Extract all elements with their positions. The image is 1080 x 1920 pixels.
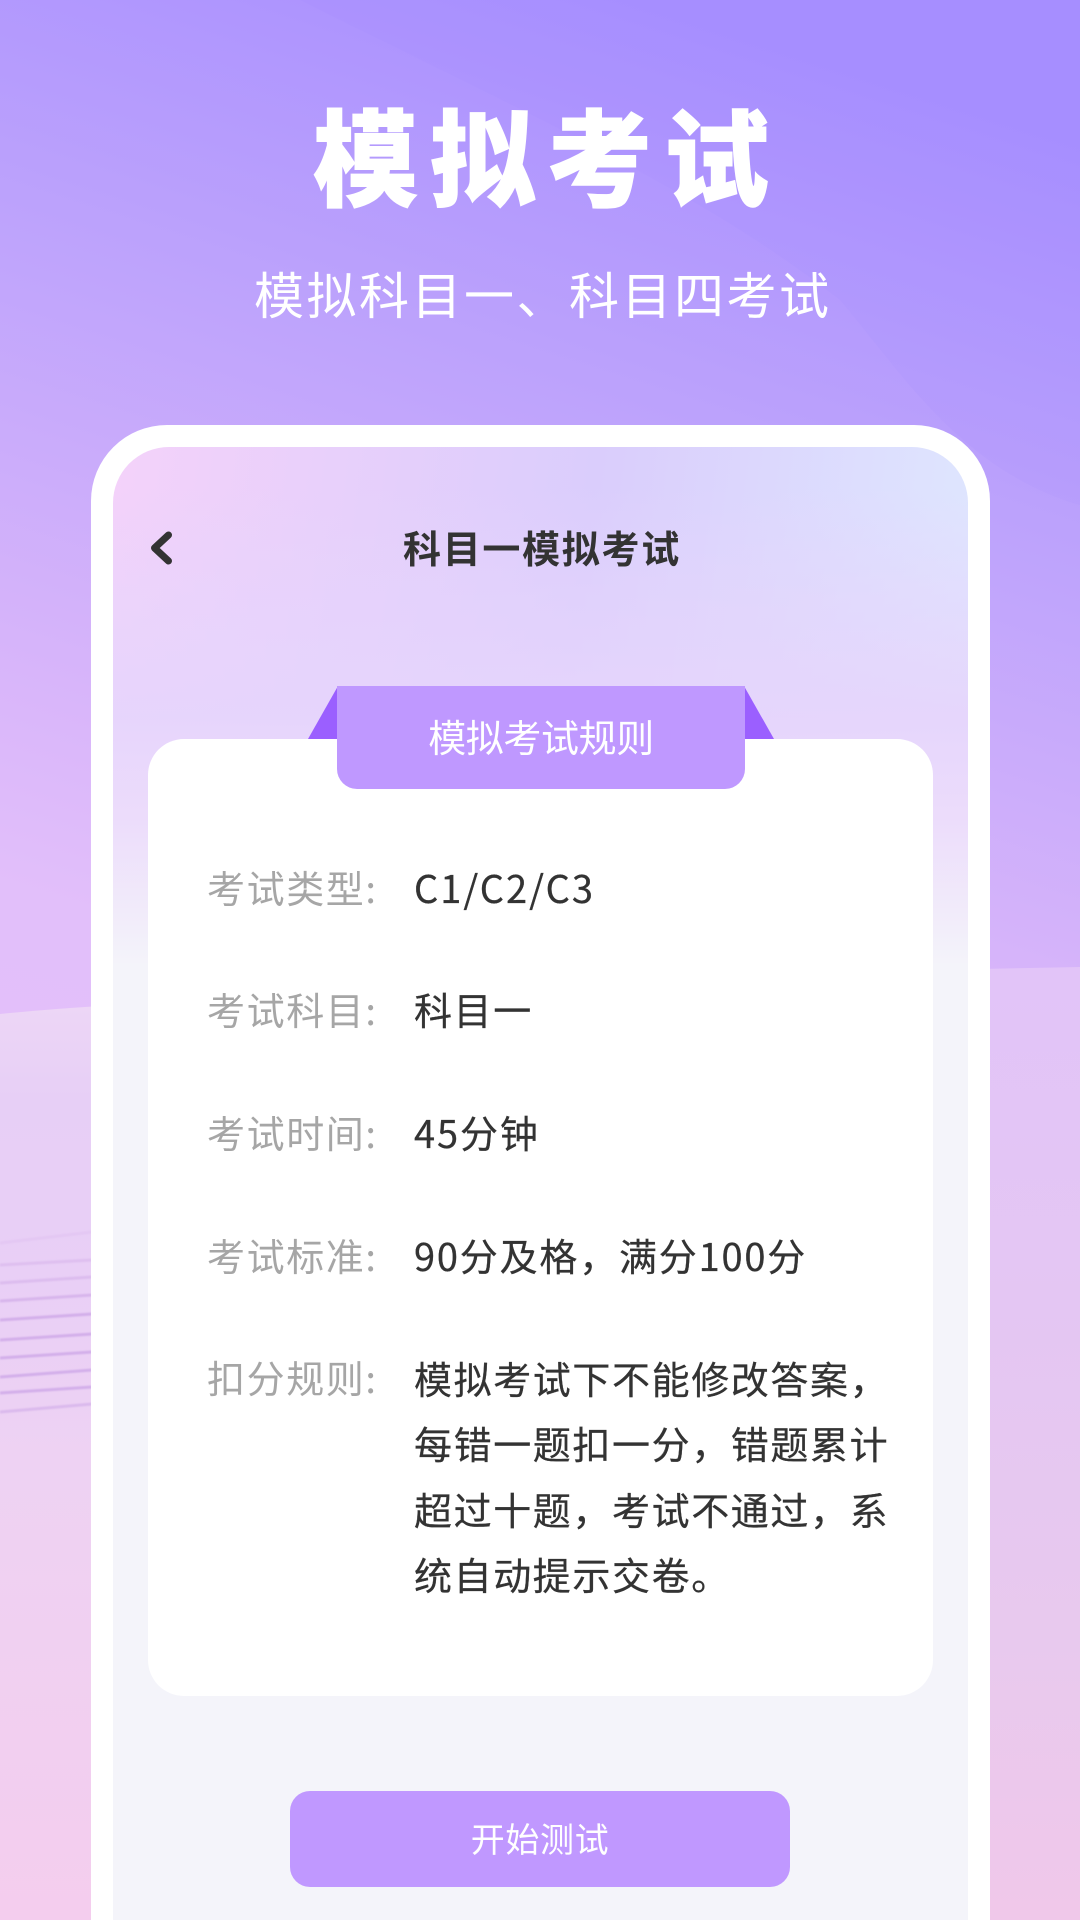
value: deduction rules: 模拟考试下不能修改答案， — [414, 1350, 889, 1405]
label: subject: 考试科目: — [207, 981, 378, 1036]
ribbon heading — [337, 686, 745, 789]
label: exam type: 考试类型: — [207, 859, 378, 914]
value: deduction rules: 超过十题，考试不通过，系 — [414, 1481, 889, 1536]
phone screen — [113, 447, 968, 1920]
value: deduction rules — [414, 1350, 889, 1601]
value: deduction rules: 统自动提示交卷。 — [414, 1546, 731, 1601]
start button — [290, 1791, 790, 1887]
start button: 开始测试 — [471, 1813, 609, 1862]
phone frame — [91, 425, 990, 1920]
ribbon fold left — [308, 688, 337, 739]
title: 模拟考试 — [313, 77, 781, 229]
value: deduction rules: 每错一题扣一分，错题累计 — [414, 1415, 889, 1470]
value: subject: 科目一 — [414, 981, 533, 1036]
rules card — [148, 739, 933, 1696]
ribbon heading: 模拟考试规则 — [428, 708, 654, 763]
screen title: 科目一模拟考试 — [403, 519, 681, 574]
label: time: 考试时间: — [207, 1104, 378, 1159]
value: time: 45分钟 — [414, 1104, 540, 1159]
ribbon fold right — [745, 688, 774, 739]
value: standard: 90分及格，满分100分 — [414, 1227, 807, 1282]
label: deduction rules: 扣分规则: — [207, 1349, 378, 1404]
back arrow icon — [151, 532, 172, 564]
value: exam type: C1/C2/C3 — [414, 859, 595, 914]
label: standard: 考试标准: — [207, 1227, 378, 1282]
subtitle: 模拟科目一、科目四考试 — [254, 257, 832, 329]
